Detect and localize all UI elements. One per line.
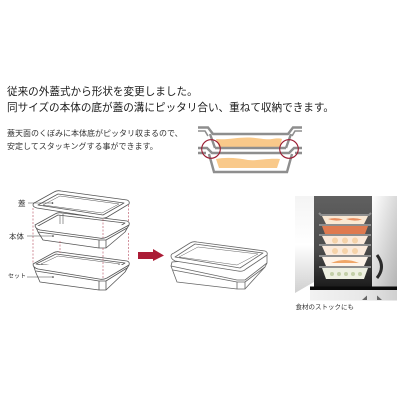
food lower	[216, 158, 280, 168]
interior	[314, 196, 372, 287]
base	[310, 286, 397, 290]
label: body: 本体	[9, 232, 24, 240]
food upper	[216, 137, 282, 147]
left door	[295, 196, 314, 293]
photo caption: 食材のストックにも	[296, 304, 354, 311]
right door	[372, 196, 397, 287]
heading: 従来の外蓋式から形状を変更しました。	[7, 86, 198, 98]
description text: 蓋天面のくぼみに本体底がピッタリ収まるので、	[7, 129, 183, 138]
tray outlines	[198, 128, 302, 172]
dashed guides	[33, 205, 128, 278]
label: lid: 蓋	[18, 198, 26, 208]
description text	[7, 129, 183, 151]
lid	[171, 242, 267, 271]
shelf tray rims	[319, 213, 371, 267]
set tray	[33, 252, 129, 290]
red circles	[202, 140, 298, 158]
label: set: セット	[8, 274, 26, 280]
shelf tray bodies	[322, 216, 368, 279]
lid	[33, 191, 129, 218]
heading	[7, 86, 334, 114]
description text: 安定してスタッキングする事ができます。	[7, 142, 158, 151]
heading: 同サイズの本体の底が蓋の溝にピッタリ合い、重ねて収納できます。	[7, 102, 334, 114]
handle	[377, 255, 382, 278]
body tray	[35, 213, 129, 248]
lower tray	[171, 255, 267, 289]
